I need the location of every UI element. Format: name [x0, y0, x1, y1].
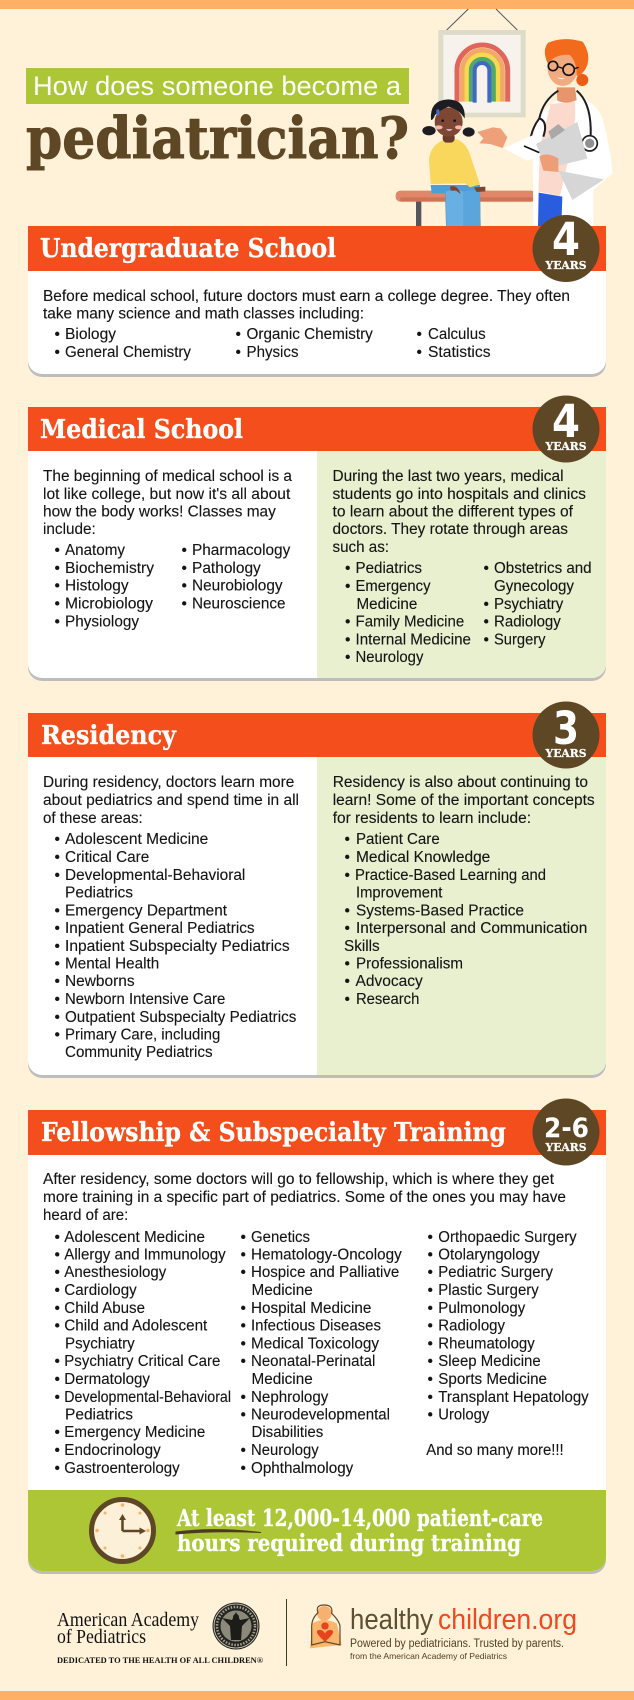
list: residency areas: Adolescent Medicine: [65, 831, 208, 848]
list: medical school rotations: Obstetrics and: [494, 560, 592, 577]
title: pediatrician?: pediatrician?: [26, 105, 409, 172]
list: medical school classes: •: [182, 542, 187, 559]
list: fellowship column 2: Medicine: [252, 1371, 313, 1388]
list: fellowship column 3: •: [428, 1318, 433, 1334]
list: residency concepts: •: [344, 902, 350, 920]
list: fellowship column 2: Disabilities: [252, 1424, 324, 1441]
badge: 3 years: [532, 702, 600, 768]
list: fellowship column 3: Pediatric Surgery: [438, 1264, 553, 1281]
list: residency areas: Mental Health: [65, 956, 159, 972]
text: medical school left intro: include:: [43, 521, 96, 538]
list: medical school classes: Neuroscience: [192, 596, 286, 612]
list: fellowship column 2: •: [240, 1336, 246, 1352]
list: fellowship column 3: Urology: [438, 1406, 490, 1424]
panel: residency right column: [317, 757, 606, 1075]
list: residency areas: •: [54, 849, 60, 866]
list: fellowship column 1: Psychiatry Critical Care: [64, 1353, 220, 1370]
list: fellowship column 1: Adolescent Medicine: [64, 1229, 205, 1246]
list: residency areas: Newborn Intensive Care: [65, 991, 225, 1008]
list: residency areas: [54, 831, 297, 1061]
list: fellowship column 3: •: [428, 1406, 433, 1424]
list: fellowship column 3: •: [428, 1264, 433, 1281]
list: fellowship column 1: •: [54, 1353, 60, 1370]
illustration: pediatrician with child: [396, 9, 613, 227]
logo: American Academy of Pediatrics: DEDICATED TO THE HEALTH OF ALL CHILDREN®: [57, 1655, 264, 1665]
list: fellowship column 1: Cardiology: [64, 1282, 137, 1299]
heading: medical school: [28, 407, 606, 451]
list: medical school rotations: •: [345, 632, 350, 648]
badge: 3 years: 3: [553, 702, 579, 755]
heading: residency: [28, 713, 606, 757]
list: fellowship column 2: Neonatal-Perinatal: [251, 1353, 375, 1370]
list: residency concepts: Advocacy: [356, 973, 423, 990]
icon: framed rainbow picture: [438, 9, 526, 117]
list: fellowship column 2: •: [240, 1442, 246, 1459]
text: fellowship intro: more training in a specific part of pediatrics. Some of the ones you may have: [43, 1189, 566, 1206]
divider: [286, 1599, 287, 1666]
list: residency concepts: •: [344, 849, 350, 866]
list: fellowship column 1: •: [54, 1246, 60, 1264]
text: medical school right intro: doctors. They rotate through areas: [332, 521, 568, 538]
text: medical school right intro: such as:: [332, 539, 389, 556]
list: medical school classes: Biochemistry: [65, 560, 154, 577]
list: residency concepts: •: [344, 956, 350, 972]
list: residency concepts: Practice-Based Learning and: [355, 867, 546, 884]
text: hours callout line 2: hours required during training: [177, 1530, 521, 1557]
list: medical school classes: Histology: [65, 578, 129, 594]
list: fellowship column 2: Neurology: [251, 1442, 319, 1459]
list: fellowship column 2: Infectious Diseases: [251, 1318, 381, 1334]
list: residency concepts: Improvement: [356, 884, 443, 902]
list: medical school rotations: •: [484, 614, 489, 630]
logo: American Academy of Pediatrics: American Academy: [57, 1609, 199, 1631]
panel: residency: [28, 702, 606, 1078]
panel: medical school: [28, 395, 606, 681]
list: fellowship column 1: •: [54, 1371, 60, 1388]
list: fellowship column 1: Developmental-Behavioral: [64, 1389, 231, 1406]
list: fellowship column 2: •: [240, 1353, 246, 1370]
list: fellowship column 3: •: [428, 1371, 433, 1388]
list: fellowship column 1: Child and Adolescent: [64, 1318, 208, 1334]
badge: 4 years: 4: [552, 395, 580, 448]
heading: undergraduate school: [28, 226, 606, 271]
list: fellowship column 3: Transplant Hepatology: [438, 1389, 589, 1406]
list: fellowship column 2: Hospice and Palliative: [251, 1264, 399, 1281]
panel: undergraduate school: [28, 213, 606, 377]
list: fellowship column 1: •: [54, 1389, 60, 1406]
list: residency areas: •: [54, 867, 60, 884]
list: medical school classes: Physiology: [65, 614, 139, 630]
list: medical school classes: •: [182, 578, 187, 594]
list: medical school rotations: •: [484, 596, 489, 613]
text: undergraduate intro: take many science and math classes including:: [43, 306, 364, 322]
list: residency concepts: Interpersonal and Communication: [356, 920, 587, 937]
list: residency areas: Community Pediatrics: [65, 1044, 213, 1061]
list: fellowship column 1: Endocrinology: [64, 1442, 161, 1459]
list: residency areas: Developmental-Behavioral: [65, 867, 245, 884]
list: fellowship column 2: Medical Toxicology: [251, 1336, 379, 1352]
list: residency concepts: •: [344, 867, 350, 884]
list: fellowship column 1: •: [54, 1282, 60, 1299]
list: undergraduate classes: •: [236, 326, 241, 343]
heading: residency: Residency: [41, 721, 177, 751]
list: residency areas: •: [54, 920, 60, 937]
text: residency right intro: learn! Some of the important concepts: [333, 792, 595, 809]
heading: fellowship and subspecialty training: [28, 1110, 606, 1155]
list: medical school classes: •: [54, 614, 60, 630]
heading: fellowship and subspecialty training: Fellowship & Subspecialty Training: [41, 1118, 506, 1148]
list: undergraduate classes: •: [54, 344, 60, 361]
list: medical school rotations: Psychiatry: [494, 596, 564, 613]
list: fellowship column 1: Emergency Medicine: [64, 1424, 205, 1441]
text: medical school right intro: students go into hospitals and clinics: [332, 486, 586, 503]
list: undergraduate classes: Calculus: [428, 326, 486, 343]
list: medical school rotations: Emergency: [356, 578, 431, 595]
list: undergraduate classes: Organic Chemistry: [246, 326, 373, 343]
list: fellowship column 2: Hospital Medicine: [251, 1300, 371, 1317]
list: fellowship column 3: •: [428, 1353, 433, 1370]
list: fellowship column 2: Genetics: [251, 1229, 310, 1246]
list: medical school classes: •: [54, 560, 60, 577]
list: medical school rotations: •: [484, 560, 489, 577]
list: fellowship column 2: •: [240, 1229, 246, 1246]
list: residency concepts: Research: [356, 991, 419, 1008]
list: residency concepts: •: [344, 991, 350, 1008]
list: medical school classes: •: [54, 542, 60, 559]
underline scribble: [176, 1530, 261, 1534]
heading: undergraduate school: Undergraduate School: [40, 234, 336, 264]
list: undergraduate classes: •: [416, 326, 422, 343]
badge: 4 years: [532, 213, 600, 282]
list: residency areas: Critical Care: [65, 849, 149, 866]
logo: American Academy of Pediatrics: of Pediatrics: [57, 1626, 146, 1648]
list: medical school classes: [54, 542, 291, 630]
list: fellowship column 1: Dermatology: [64, 1371, 150, 1388]
list: residency concepts: Medical Knowledge: [356, 849, 490, 866]
list: fellowship column 1: •: [54, 1442, 60, 1459]
list: medical school classes: Neurobiology: [192, 578, 283, 594]
icon: child patient: [422, 99, 485, 226]
list: medical school rotations: Surgery: [494, 632, 546, 648]
list: residency concepts: •: [344, 920, 350, 937]
list: medical school rotations: Family Medicine: [356, 614, 464, 630]
list: medical school classes: •: [54, 578, 60, 594]
icon: AAP seal: [212, 1602, 260, 1650]
list: fellowship column 2: •: [240, 1264, 246, 1281]
list: undergraduate classes: General Chemistry: [65, 344, 191, 361]
list: fellowship column 3: •: [428, 1282, 433, 1299]
badge: 2-6 years: 2-6: [544, 1113, 589, 1144]
list: fellowship column 3: Radiology: [438, 1318, 505, 1334]
panel: medical school right column: [317, 451, 606, 678]
badge: 2-6 years: YEARS: [545, 1140, 586, 1154]
list: residency areas: •: [54, 831, 60, 848]
list: fellowship column 3: •: [428, 1300, 433, 1317]
list: fellowship column 1: Pediatrics: [65, 1406, 133, 1424]
text: undergraduate intro: Before medical school, future doctors must earn a college degree. They often: [43, 288, 570, 305]
badge: 3 years: YEARS: [545, 746, 586, 760]
panel: fellowship and subspecialty training: [28, 1098, 606, 1574]
top band: [0, 0, 634, 9]
heading: medical school: Medical School: [40, 415, 243, 445]
list: fellowship column 3: Rheumatology: [438, 1336, 535, 1352]
list: fellowship column 3: Orthopaedic Surgery: [438, 1229, 577, 1246]
list: fellowship column 2: •: [240, 1246, 246, 1264]
list: fellowship column 2: •: [240, 1300, 246, 1317]
logo: American Academy of Pediatrics: [57, 1602, 264, 1665]
logo: healthychildren.org: Powered by pediatricians. Trusted by parents.: [350, 1638, 564, 1650]
list: fellowship column 2: •: [240, 1406, 246, 1424]
list: fellowship column 3: Pulmonology: [438, 1300, 526, 1317]
list: undergraduate classes: Statistics: [428, 344, 491, 361]
list: medical school rotations: •: [345, 560, 350, 577]
list: medical school classes: •: [54, 596, 60, 612]
list: fellowship column 2: Nephrology: [251, 1389, 329, 1406]
list: residency areas: Primary Care, including: [65, 1026, 220, 1044]
list: fellowship column 1: •: [54, 1264, 60, 1281]
list: fellowship column 3: And so many more!!!: [426, 1442, 564, 1459]
logo: healthychildren.org: from the American Academy of Pediatrics: [350, 1651, 507, 1661]
list: fellowship column 2: [240, 1229, 402, 1477]
badge: 2-6 years: [532, 1098, 600, 1166]
list: residency concepts: Systems-Based Practice: [356, 902, 524, 920]
list: residency areas: Newborns: [65, 973, 135, 990]
list: medical school rotations: •: [345, 614, 350, 630]
list: fellowship column 3: •: [428, 1246, 433, 1264]
list: medical school rotations: Internal Medicine: [356, 632, 471, 648]
list: undergraduate classes: •: [54, 326, 60, 343]
badge: 4 years: YEARS: [545, 439, 586, 453]
list: undergraduate classes: [54, 326, 491, 361]
list: fellowship column 1: •: [54, 1318, 60, 1334]
list: medical school rotations: Gynecology: [494, 578, 574, 595]
logo: healthychildren.org: children.org: [438, 1604, 577, 1636]
list: medical school rotations: •: [345, 578, 350, 595]
list: fellowship column 3: •: [428, 1389, 433, 1406]
list: fellowship column 1: Anesthesiology: [64, 1264, 167, 1281]
badge: 4 years: 4: [552, 213, 580, 266]
list: undergraduate classes: •: [236, 344, 241, 361]
title: how does someone become a: How does someone become a: [33, 71, 402, 101]
list: residency areas: •: [54, 1009, 60, 1026]
callout: patient-care hours: [28, 1490, 606, 1571]
list: fellowship column 2: •: [240, 1318, 246, 1334]
list: fellowship column 3: Otolaryngology: [438, 1246, 540, 1264]
list: medical school classes: •: [182, 596, 187, 612]
list: undergraduate classes: Biology: [65, 326, 116, 343]
list: fellowship column 1: •: [54, 1229, 60, 1246]
text: residency right intro: for residents to learn include:: [333, 810, 531, 827]
list: medical school rotations: Radiology: [494, 614, 561, 630]
list: fellowship column 1: [54, 1229, 231, 1477]
icon: exam bench: [396, 191, 536, 227]
list: residency concepts: [344, 831, 587, 1008]
list: fellowship column 3: Sports Medicine: [438, 1371, 547, 1388]
text: fellowship intro: heard of are:: [43, 1207, 128, 1224]
list: residency areas: •: [54, 1026, 60, 1044]
icon: clock: [92, 1500, 154, 1562]
list: fellowship column 3: Sleep Medicine: [438, 1353, 541, 1370]
list: residency areas: Inpatient Subspecialty Pediatrics: [65, 938, 290, 955]
list: medical school classes: Anatomy: [65, 542, 125, 559]
list: medical school rotations: Neurology: [356, 649, 424, 666]
list: fellowship column 1: •: [54, 1424, 60, 1441]
list: medical school rotations: [345, 560, 592, 666]
list: residency concepts: Patient Care: [356, 831, 440, 848]
badge: 4 years: [532, 395, 600, 462]
list: fellowship column 1: Allergy and Immunology: [64, 1246, 226, 1264]
list: fellowship column 3: [426, 1229, 589, 1459]
list: fellowship column 1: Gastroenterology: [64, 1460, 180, 1477]
list: fellowship column 2: Medicine: [252, 1282, 313, 1299]
list: undergraduate classes: •: [416, 344, 422, 361]
icon: healthychildren figure: [310, 1605, 342, 1648]
text: fellowship intro: After residency, some doctors will go to fellowship, which is where they get: [43, 1171, 555, 1188]
text: hours callout line 1: At least 12,000-14,000 patient-care: [176, 1505, 543, 1532]
list: residency areas: Pediatrics: [65, 884, 133, 902]
list: residency concepts: Professionalism: [356, 956, 463, 972]
list: undergraduate classes: Physics: [246, 344, 299, 361]
list: medical school rotations: •: [484, 632, 489, 648]
list: medical school classes: Microbiology: [65, 596, 153, 612]
list: residency areas: Inpatient General Pediatrics: [65, 920, 255, 937]
list: residency areas: Emergency Department: [65, 902, 228, 920]
list: medical school rotations: Pediatrics: [356, 560, 422, 577]
list: residency areas: •: [54, 902, 60, 920]
list: fellowship column 2: •: [240, 1389, 246, 1406]
list: fellowship column 3: •: [428, 1336, 433, 1352]
list: fellowship column 1: Child Abuse: [64, 1300, 145, 1317]
list: medical school classes: Pharmacology: [192, 542, 291, 559]
list: fellowship column 3: •: [428, 1229, 433, 1246]
list: residency concepts: •: [344, 973, 350, 990]
list: residency concepts: Skills: [344, 938, 380, 955]
list: residency areas: •: [54, 973, 60, 990]
logo: healthychildren.org: healthy: [350, 1604, 433, 1636]
list: medical school classes: •: [182, 560, 187, 577]
list: medical school rotations: •: [345, 649, 350, 666]
text: medical school left intro: The beginning of medical school is a: [43, 468, 292, 485]
text: residency left intro: of these areas:: [43, 810, 143, 827]
list: residency areas: •: [54, 938, 60, 955]
list: medical school classes: Pathology: [192, 560, 261, 577]
text: residency left intro: about pediatrics and spend time in all: [43, 792, 299, 809]
list: fellowship column 1: Psychiatry: [65, 1336, 135, 1352]
text: residency right intro: Residency is also about continuing to: [333, 774, 588, 791]
list: medical school rotations: Medicine: [356, 596, 417, 613]
list: fellowship column 1: •: [54, 1300, 60, 1317]
list: fellowship column 2: Ophthalmology: [251, 1460, 354, 1477]
badge: 4 years: YEARS: [545, 258, 586, 272]
list: residency concepts: •: [344, 831, 350, 848]
text: medical school left intro: how the body works! Classes may: [43, 504, 276, 520]
bottom band: [0, 1691, 634, 1700]
text: medical school left intro: lot like college, but now it's all about: [43, 486, 291, 503]
list: fellowship column 1: •: [54, 1460, 60, 1477]
list: fellowship column 2: Hematology-Oncology: [251, 1246, 402, 1264]
logo: healthychildren.org: [310, 1604, 577, 1661]
list: residency areas: •: [54, 956, 60, 972]
list: residency areas: •: [54, 991, 60, 1008]
list: fellowship column 2: Neurodevelopmental: [251, 1406, 390, 1424]
text: medical school right intro: to learn about the different types of: [332, 504, 574, 520]
text: medical school right intro: During the last two years, medical: [332, 468, 564, 485]
list: fellowship column 2: •: [240, 1460, 246, 1477]
list: fellowship column 3: Plastic Surgery: [438, 1282, 539, 1299]
list: residency areas: Outpatient Subspecialty Pediatrics: [65, 1009, 297, 1026]
icon: doctor: [477, 39, 613, 226]
text: residency left intro: During residency, doctors learn more: [43, 774, 294, 791]
